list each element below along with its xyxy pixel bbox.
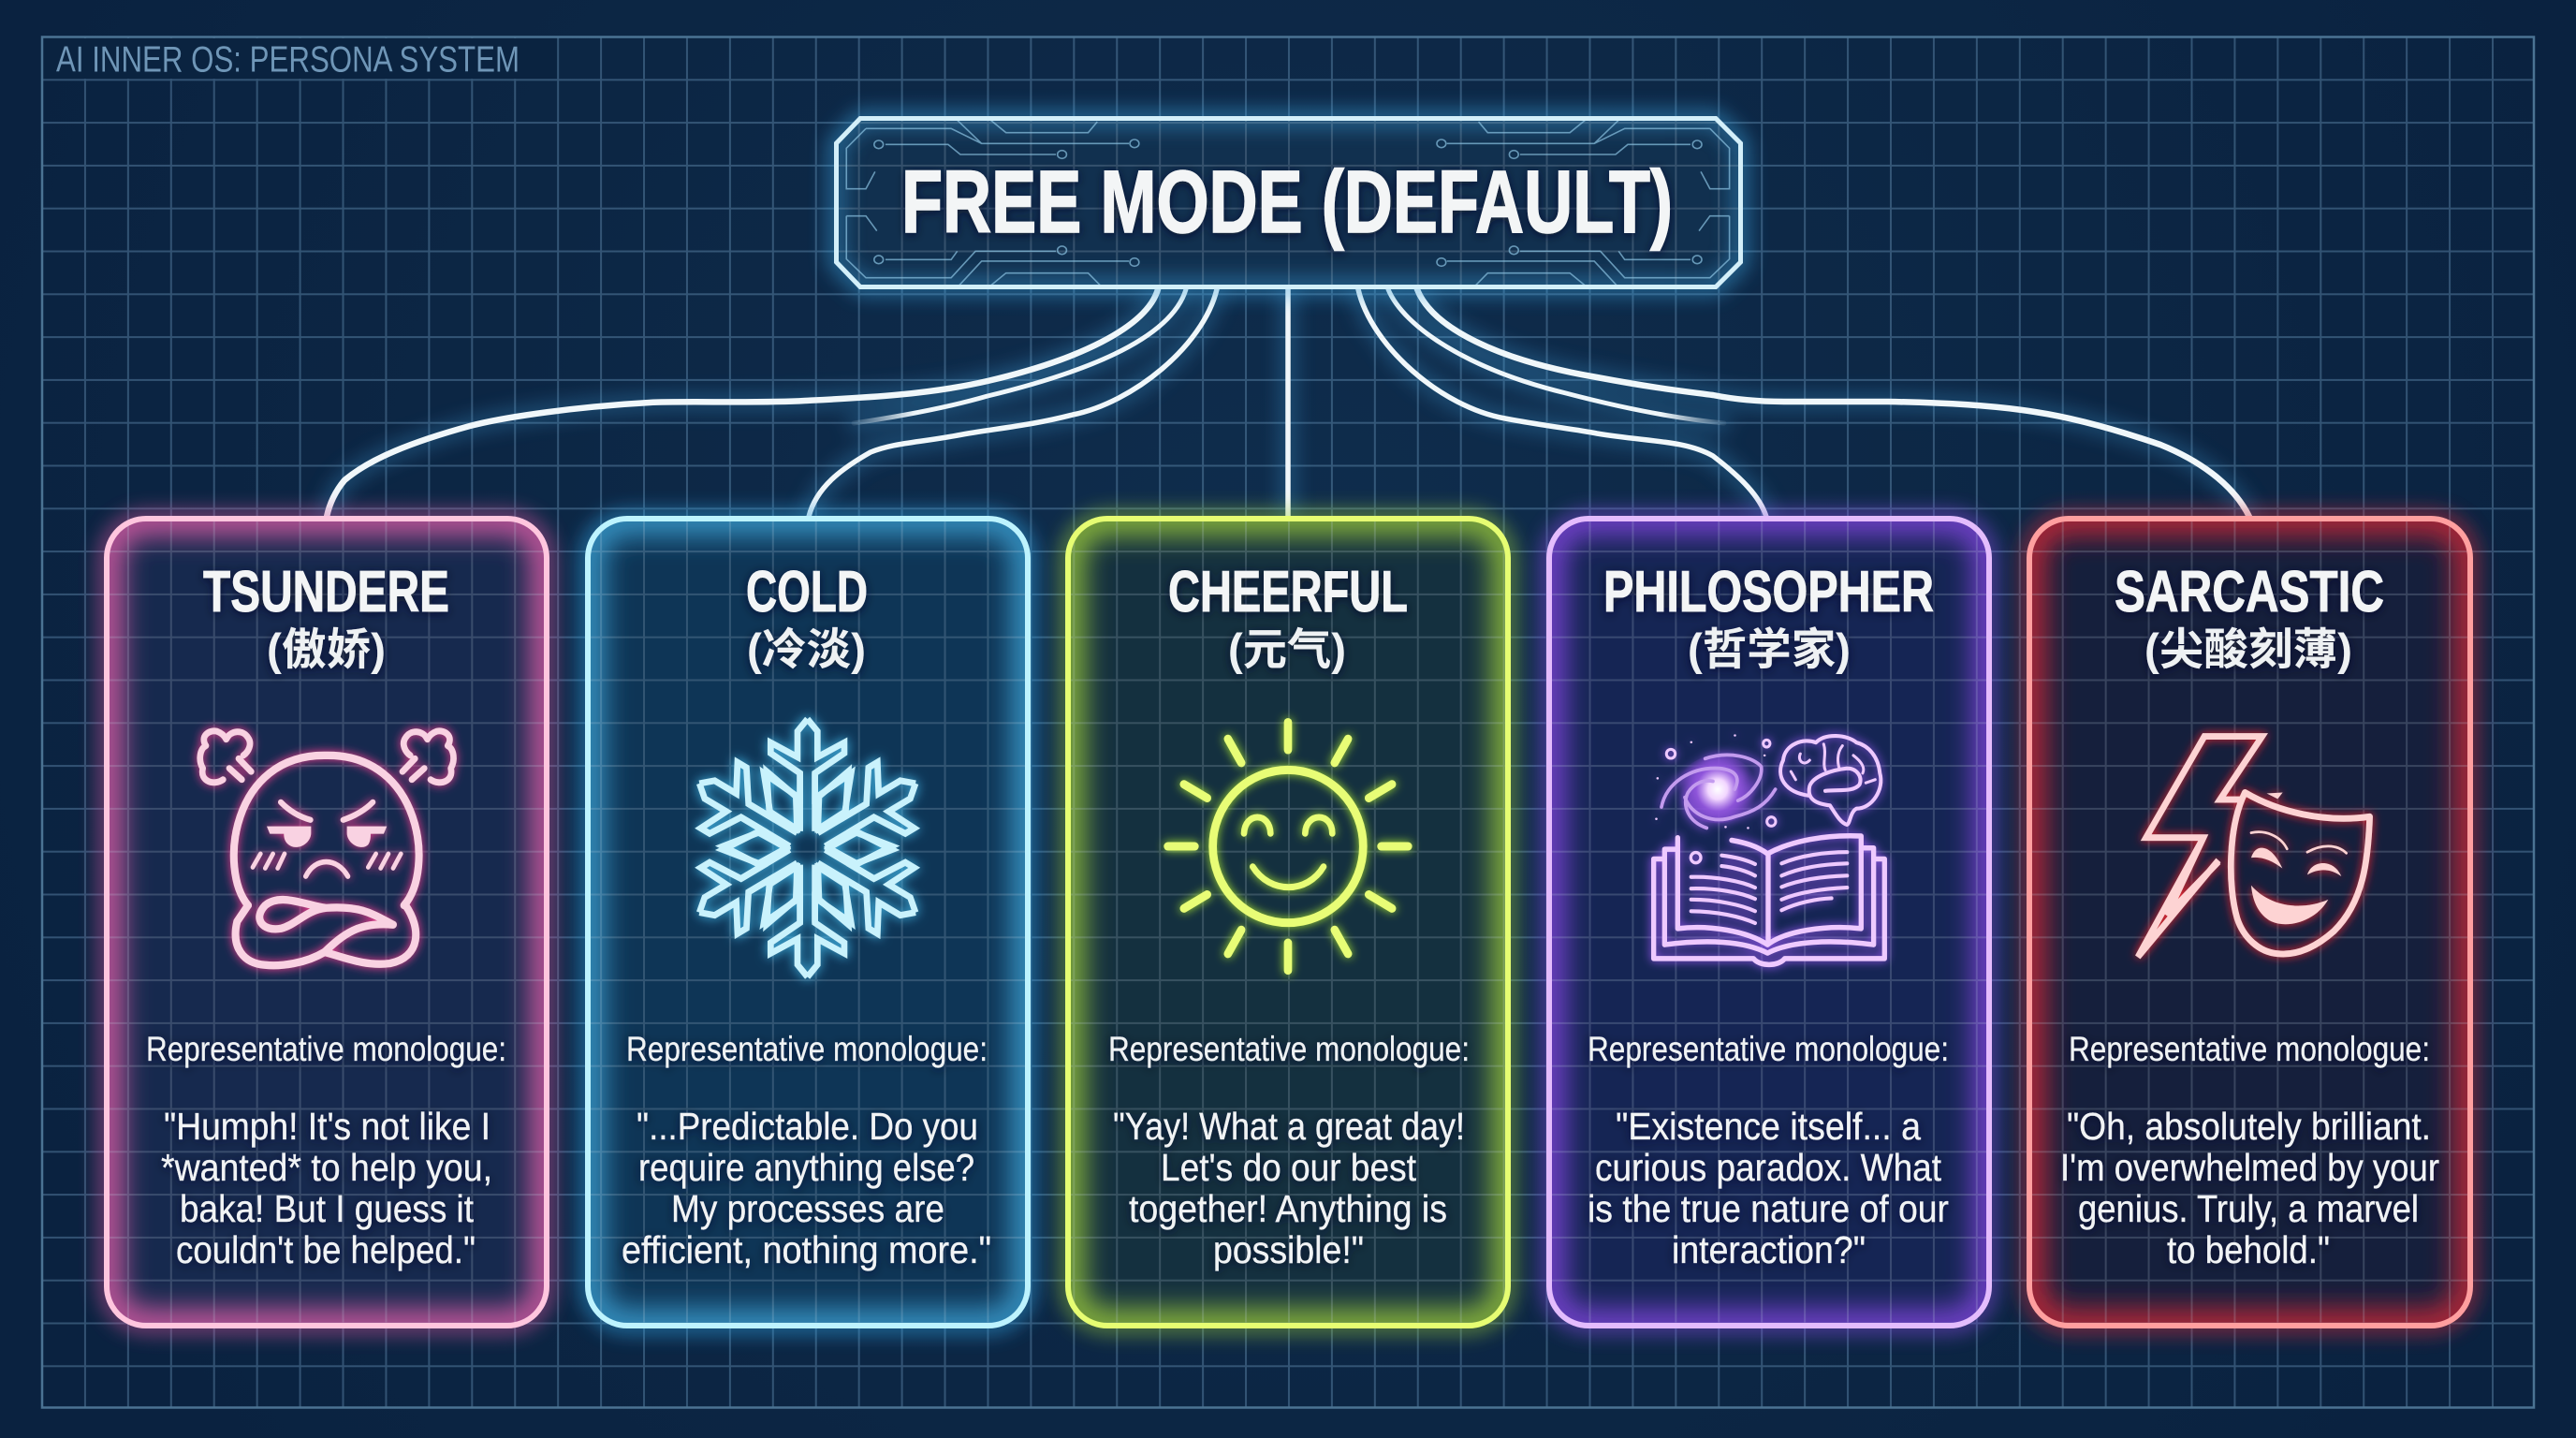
heading: philosopher: (哲学家) xyxy=(1688,624,1851,674)
system title: AI INNER OS: PERSONA SYSTEM xyxy=(56,39,520,81)
monologue: sarcastic: "Oh, absolutely brilliant. xyxy=(2067,1105,2431,1148)
monologue: philosopher: "Existence itself... a xyxy=(1616,1105,1921,1148)
heading: sarcastic xyxy=(2115,560,2384,674)
monologue: cheerful xyxy=(1108,1030,1470,1271)
heading: cheerful: (元气) xyxy=(1228,624,1346,674)
monologue: tsundere: Representative monologue: xyxy=(146,1030,506,1068)
monologue: cold: require anything else? xyxy=(638,1146,974,1189)
monologue: cold: efficient, nothing more." xyxy=(622,1228,991,1271)
connector: cold xyxy=(809,289,1217,517)
heading: cheerful xyxy=(1168,560,1408,674)
monologue: cheerful: possible!" xyxy=(1213,1228,1364,1271)
monologue: cold: My processes are xyxy=(671,1187,944,1230)
panel: philosopher xyxy=(1549,519,1989,1326)
icon: smiling sun xyxy=(1168,722,1408,971)
monologue: tsundere: *wanted* to help you, xyxy=(161,1146,492,1189)
monologue: tsundere: couldn't be helped." xyxy=(176,1228,476,1271)
monologue: cold xyxy=(622,1030,991,1271)
panel: tsundere xyxy=(107,519,547,1326)
monologue: sarcastic xyxy=(2060,1030,2439,1271)
heading: cold: (冷淡) xyxy=(747,624,866,674)
monologue: cheerful: "Yay! What a great day! xyxy=(1113,1105,1465,1148)
icon part: brain xyxy=(1780,736,1881,825)
heading: sarcastic: SARCASTIC xyxy=(2115,560,2384,624)
connectors from header to persona cards xyxy=(327,289,2249,517)
icon part: galaxy xyxy=(1656,736,1776,828)
panel: sarcastic xyxy=(2029,519,2470,1326)
heading: tsundere: TSUNDERE xyxy=(203,560,449,624)
monologue: sarcastic: to behold." xyxy=(2167,1228,2330,1271)
monologue: sarcastic: I'm overwhelmed by your xyxy=(2060,1146,2439,1189)
header: free mode xyxy=(836,118,1741,287)
monologue: sarcastic: genius. Truly, a marvel xyxy=(2078,1187,2419,1230)
icon: angry face with crossed arms xyxy=(200,731,454,965)
monologue: sarcastic: Representative monologue: xyxy=(2069,1030,2430,1068)
monologue: philosopher: interaction?" xyxy=(1672,1228,1866,1271)
header title: FREE MODE (DEFAULT) xyxy=(901,153,1673,252)
heading: philosopher: PHILOSOPHER xyxy=(1603,560,1934,624)
monologue: tsundere: baka! But I guess it xyxy=(180,1187,475,1230)
heading: cold: COLD xyxy=(746,560,868,624)
monologue: philosopher: Representative monologue: xyxy=(1588,1030,1949,1068)
heading: tsundere: (傲娇) xyxy=(267,624,386,674)
monologue: cheerful: together! Anything is xyxy=(1129,1187,1447,1230)
heading: philosopher xyxy=(1603,560,1934,674)
icon: galaxy, brain and open book xyxy=(1654,736,1884,964)
connector: tsundere xyxy=(327,289,1158,517)
connector: cheerful xyxy=(1285,289,1291,516)
monologue: tsundere: "Humph! It's not like I xyxy=(164,1105,490,1148)
monologue: philosopher: curious paradox. What xyxy=(1595,1146,1942,1189)
icon part: lightning bolt xyxy=(2138,737,2262,957)
panel: cheerful xyxy=(1068,519,1508,1326)
heading: tsundere xyxy=(203,560,449,674)
connector: fading left branch xyxy=(854,289,1186,423)
monologue: cheerful: Let's do our best xyxy=(1161,1146,1417,1189)
monologue: philosopher xyxy=(1588,1030,1949,1271)
monologue: tsundere xyxy=(146,1030,506,1271)
panel: cold xyxy=(588,519,1028,1326)
icon: snowflake xyxy=(678,719,937,977)
connector: fading right branch xyxy=(1388,289,1724,423)
header circuit traces xyxy=(846,120,1730,286)
monologue: philosopher: is the true nature of our xyxy=(1588,1187,1949,1230)
monologue: cold: Representative monologue: xyxy=(626,1030,988,1068)
connector: sarcastic xyxy=(1417,289,2249,517)
icon part: theatre mask xyxy=(2231,793,2370,954)
heading: cheerful: CHEERFUL xyxy=(1168,560,1408,624)
monologue: cold: "...Predictable. Do you xyxy=(637,1105,978,1148)
heading: sarcastic: (尖酸刻薄) xyxy=(2144,624,2352,674)
connector: philosopher xyxy=(1358,289,1766,517)
icon: lightning bolt and theatre mask xyxy=(2138,737,2370,957)
monologue: cheerful: Representative monologue: xyxy=(1108,1030,1470,1068)
icon part: open book xyxy=(1654,836,1884,964)
heading: cold xyxy=(746,560,868,674)
